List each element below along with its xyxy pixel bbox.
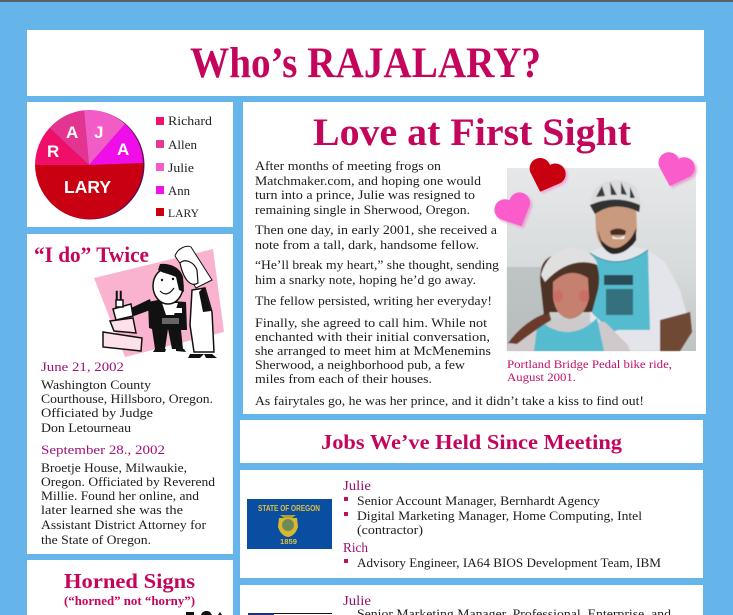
story text <box>255 158 644 408</box>
panel: love at first sight <box>243 102 706 414</box>
story text: she arranged to meet him at McMenemins <box>255 343 491 358</box>
text: second wedding: later learned she was the <box>41 502 183 517</box>
pie chart <box>35 110 144 220</box>
caption: August 2001. <box>507 370 576 384</box>
text: second wedding: the State of Oregon. <box>41 532 151 547</box>
icon: US flag top edge <box>248 613 332 615</box>
story text: turn into a prince, Julie was resigned to <box>255 187 475 202</box>
icon: pink heart left <box>491 189 540 236</box>
caption: Portland Bridge Pedal bike ride, <box>507 357 672 371</box>
icon: horned sign clipart <box>186 611 222 615</box>
pie chart: J <box>94 123 103 142</box>
pie chart: A <box>117 140 129 159</box>
pie chart: R <box>47 142 59 161</box>
story text: miles from each of their houses. <box>255 371 432 386</box>
job list: Advisory Engineer, IA64 BIOS Development Team, IBM <box>357 555 661 570</box>
text: second wedding: Oregon. Officiated by Reverend <box>41 474 216 489</box>
story text: Then one day, in early 2001, she received a <box>255 222 497 237</box>
icon: Oregon flag: STATE OF OREGON <box>258 504 320 513</box>
job list <box>343 478 661 570</box>
heading: horned signs: Horned Signs <box>64 569 195 593</box>
heading: jobs: Jobs We’ve Held Since Meeting <box>321 430 622 454</box>
text: first wedding: Officiated by Judge <box>41 405 153 420</box>
story text: enchanted with their initial conversation, <box>255 329 490 344</box>
text: first wedding: Courthouse, Hillsboro, Oregon. <box>41 391 213 406</box>
panel: horned signs <box>27 560 233 615</box>
icon: red heart <box>523 155 571 200</box>
story text: The fellow persisted, writing her everyday! <box>255 293 492 308</box>
story text: Sherwood, a neighborhood pub, a few <box>255 357 466 372</box>
legend: Julie <box>168 160 194 175</box>
panel: jobs 1 <box>240 470 703 578</box>
story text: note from a tall, dark, handsome fellow. <box>255 237 479 252</box>
pie chart: A <box>66 123 78 142</box>
heading: I do twice: “I do” Twice <box>34 242 149 267</box>
man <box>590 246 690 351</box>
text: second wedding: Broetje House, Milwaukie, <box>41 460 187 475</box>
story text: After months of meeting frogs on <box>255 158 442 173</box>
heading: love at first sight: Love at First Sight <box>313 111 631 154</box>
job list: Digital Marketing Manager, Home Computing, Intel <box>357 508 642 523</box>
job list: Julie <box>343 478 371 493</box>
legend: Allen <box>168 137 197 152</box>
cake <box>103 291 142 351</box>
text: second wedding: Assistant District Attorney for <box>41 517 207 532</box>
legend: LARY <box>168 206 199 220</box>
text: second wedding <box>41 442 216 547</box>
story text: As fairytales go, he was her prince, and it didn’t take a kiss to find out! <box>255 393 644 408</box>
photo: couple on bike ride <box>507 168 696 351</box>
text: first wedding: Washington County <box>41 377 152 392</box>
text: first wedding: Don Letourneau <box>41 420 132 435</box>
subheading: (“horned” not “horny”) <box>64 594 195 608</box>
panel: title <box>27 30 704 96</box>
icon: pink heart right <box>652 150 699 194</box>
bride <box>175 246 217 358</box>
legend: Ann <box>168 183 190 198</box>
icon: Oregon flag: 1859 <box>280 537 297 546</box>
story text: Matchmaker.com, and hoping one would <box>255 173 482 188</box>
job list <box>343 593 672 615</box>
job list: Rich <box>343 540 368 555</box>
story text: him a snarky note, hoping he’d go away. <box>255 272 476 287</box>
job list: Julie <box>343 593 371 608</box>
text: first wedding <box>41 359 213 435</box>
job list: Senior Account Manager, Bernhardt Agency <box>357 493 601 508</box>
illustration: wedding couple and cake <box>94 246 224 358</box>
text: second wedding: Millie. Found her online, and <box>41 488 200 503</box>
story text: Finally, she agreed to call him. While not <box>255 315 487 330</box>
panel: I do twice <box>27 234 233 554</box>
legend: Richard <box>168 113 213 128</box>
groom <box>129 264 187 352</box>
job list: (contractor) <box>357 522 423 537</box>
icon: Oregon flag <box>247 499 332 549</box>
story text: “He’ll break my heart,” she thought, sending <box>255 257 500 272</box>
panel: pie chart <box>27 102 233 227</box>
woman <box>507 322 630 351</box>
title: Who’s RAJALARY? <box>190 40 541 87</box>
panel: jobs heading <box>240 420 703 463</box>
pie chart: LARY <box>64 177 111 197</box>
text: second wedding: September 28., 2002 <box>41 442 165 457</box>
legend <box>156 113 213 220</box>
text: first wedding: June 21, 2002 <box>41 359 124 374</box>
panel: jobs 2 <box>240 585 703 615</box>
story text: remaining single in Sherwood, Oregon. <box>255 202 470 217</box>
caption <box>507 357 672 384</box>
